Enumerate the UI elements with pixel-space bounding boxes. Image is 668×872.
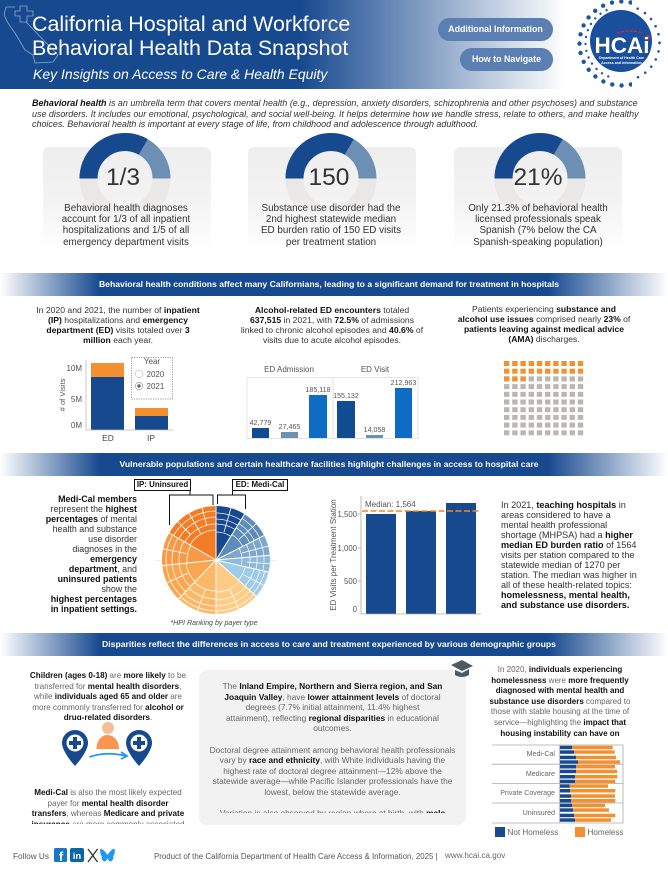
bar chart: alcohol-related ED encounters: ED Visit bbox=[361, 365, 390, 374]
bar chart: alcohol-related ED encounters bbox=[246, 365, 418, 439]
text: teaching hospitals: shortage (MHPSA) had a higher bbox=[501, 530, 633, 540]
stat text 2: per treatment station bbox=[286, 237, 376, 248]
bar chart: homelessness by payer: Medicare bbox=[526, 770, 555, 778]
legend: year selector: 2020 bbox=[146, 370, 165, 379]
stat number 1/3: 1/3 bbox=[106, 164, 140, 191]
gauge 2 bbox=[294, 142, 368, 215]
bar chart: ED visits per treatment station: Median: 1,564 bbox=[365, 500, 416, 509]
header banner bbox=[0, 0, 668, 89]
text: regional and racial disparities: lowest, below the statewide average. bbox=[264, 787, 401, 797]
donut gauges bbox=[80, 133, 586, 208]
logo: HCAI bbox=[577, 0, 661, 88]
text: IP and ED visits bbox=[36, 305, 200, 345]
legend: year selector: 2021 bbox=[146, 382, 165, 391]
section heading: demand bbox=[0, 273, 668, 296]
logo: HCAI: Access and Information bbox=[601, 61, 642, 65]
chart note: *HPI Ranking by payer type bbox=[170, 619, 258, 627]
fade over gauge 1 bottom bbox=[75, 198, 175, 226]
text: regional and racial disparities: Joaquin Valley, have lower attainment levels of doctoral bbox=[224, 692, 441, 702]
text: children and older adults bbox=[30, 671, 186, 720]
text: regional and racial disparities: degrees (7.7% initial attainment, 11.4% highest bbox=[246, 702, 419, 712]
text: AMA discharges: alcohol use issues comprised nearly 23% of bbox=[458, 314, 630, 324]
button: how to navigate bbox=[460, 48, 553, 71]
subtitle: Key Insights on Access to Care & Health Equity bbox=[33, 66, 327, 82]
text: Medi-Cal members: show the bbox=[101, 584, 137, 594]
section heading: disparities: Disparities reflect the differences in access to care and treatment experienced by various demographic groups bbox=[102, 639, 556, 649]
bar chart: ED visits per treatment station: 0 bbox=[353, 605, 358, 614]
bar chart: ED visits per treatment station bbox=[329, 496, 481, 614]
bar chart: alcohol-related ED encounters: 155,132 bbox=[333, 392, 359, 400]
text: Medi-Cal members: diagnoses in the bbox=[72, 544, 137, 554]
text: IP and ED visits: million each year. bbox=[83, 335, 153, 345]
section heading: disparities bbox=[0, 633, 668, 656]
text: regional and racial disparities: outcomes. bbox=[313, 723, 352, 733]
stat text 2 bbox=[261, 202, 401, 248]
text: Medi-Cal transfers: payer for mental health disorder bbox=[47, 799, 168, 808]
logo: HCAI: Department of Health Care bbox=[599, 56, 644, 60]
text: Medi-Cal members: health and substance bbox=[53, 524, 137, 534]
text: teaching hospitals: station. The median was higher in bbox=[501, 570, 637, 580]
stat text 1: hospitalizations and 1/5 of all bbox=[63, 225, 189, 236]
text: homelessness: housing instability can have on bbox=[500, 729, 620, 738]
text: homelessness: In 2020, individuals experiencing bbox=[498, 665, 622, 674]
text: homelessness bbox=[490, 665, 630, 738]
button: additional information: Additional Information bbox=[448, 24, 543, 34]
button: how to navigate: How to Navigate bbox=[472, 54, 541, 64]
text: Medi-Cal members: use disorder bbox=[88, 534, 137, 544]
stat text 3: Only 21.3% of behavioral health bbox=[468, 202, 608, 214]
bar chart: visits by setting: 5M bbox=[71, 395, 82, 404]
text: alcohol-related encounters bbox=[241, 305, 424, 345]
text: regional and racial disparities: vary by race and ethnicity, with White individuals having the bbox=[220, 755, 445, 765]
text: regional and racial disparities: attainment), reflecting regional disparities in educational bbox=[226, 713, 439, 723]
text: teaching hospitals: mental health professional bbox=[501, 520, 607, 530]
bar chart: visits by setting: IP bbox=[147, 433, 155, 443]
text: teaching hospitals: areas considered to have a bbox=[501, 510, 611, 520]
bar chart: alcohol-related ED encounters: 42,779 bbox=[250, 419, 271, 427]
section heading: vulnerable populations: Vulnerable populations and certain healthcare facilities highlight challenges in access to hospital care bbox=[119, 459, 539, 469]
intro text bbox=[32, 98, 639, 129]
text: regional and racial disparities: The Inland Empire, Northern and Sierra region, and San bbox=[223, 681, 442, 691]
text: IP and ED visits: In 2020 and 2021, the number of inpatient bbox=[36, 305, 200, 315]
text: teaching hospitals bbox=[501, 500, 637, 610]
text: Medi-Cal members: emergency bbox=[90, 554, 137, 564]
stat text 3 bbox=[468, 202, 608, 248]
stat number 21%: 21% bbox=[513, 164, 563, 191]
footer: follow us: Follow Us bbox=[13, 852, 49, 861]
gauge 1 bbox=[88, 142, 162, 215]
bar chart: alcohol-related ED encounters: 27,465 bbox=[279, 423, 300, 431]
text: Medi-Cal members: department, and bbox=[69, 564, 137, 574]
bar chart: alcohol-related ED encounters: ED Admission bbox=[264, 365, 314, 374]
text: alcohol-related encounters: visits due to acute alcohol episodes. bbox=[263, 335, 401, 345]
text: homelessness: homelessness were more frequently bbox=[491, 676, 629, 685]
bar chart: ED visits per treatment station: 1,500 bbox=[337, 510, 358, 519]
bar chart: alcohol-related ED encounters: 212,963 bbox=[391, 379, 416, 387]
text: children and older adults: transferred for mental health disorders, bbox=[35, 682, 181, 691]
callout: IP uninsured bbox=[134, 479, 191, 491]
bar chart: visits by setting: 0M bbox=[71, 421, 82, 430]
text: teaching hospitals: homelessness, mental health, bbox=[501, 590, 630, 600]
bar chart: ED visits per treatment station: 1,000 bbox=[337, 544, 358, 553]
text: AMA discharges: patients leaving against medical advice bbox=[464, 324, 624, 334]
bar chart: homelessness by payer: Private Coverage bbox=[500, 789, 555, 797]
text: regional and racial disparities: statewide average—while Pacific Islander professionals have the bbox=[213, 776, 452, 786]
panel: stat card 150 bbox=[248, 147, 416, 252]
text: teaching hospitals: and substance use disorders. bbox=[501, 600, 629, 610]
text: regional and racial disparities bbox=[210, 681, 456, 813]
text: regional and racial disparities: highest rate of doctoral degree attainment—12% above the bbox=[223, 766, 442, 776]
bar chart: homelessness by payer: Medi-Cal bbox=[527, 750, 555, 758]
text: Medi-Cal members: uninsured patients bbox=[58, 574, 137, 584]
text: IP and ED visits: (IP) hospitalizations and emergency bbox=[48, 315, 188, 325]
stat text 2: Substance use disorder had the bbox=[262, 202, 400, 214]
text: Medi-Cal members: percentages of mental bbox=[46, 514, 137, 524]
intro text: Behavioral health is an umbrella term that covers mental health (e.g., depression, anxiety disorders, schizophrenia and other psychoses) and substance bbox=[32, 98, 638, 108]
footer: website: www.hcai.ca.gov bbox=[445, 851, 505, 860]
title: Behavioral Health Data Snapshot bbox=[32, 36, 348, 60]
fade over gauge 3 bottom bbox=[490, 198, 590, 226]
text: Medi-Cal transfers bbox=[32, 788, 184, 824]
text: Medi-Cal members bbox=[46, 494, 137, 614]
text: Medi-Cal members: highest percentages bbox=[51, 594, 137, 604]
text: Medi-Cal transfers: Medi-Cal is also the most likely expected bbox=[34, 788, 182, 797]
footer: product credit: Product of the California Department of Health Care Access & Information, 2025 | bbox=[154, 852, 438, 861]
callout connector lines bbox=[169, 491, 246, 525]
text: homelessness: substance use disorders compared to bbox=[490, 697, 630, 706]
icon: California outline with cross bbox=[4, 6, 58, 64]
text: homelessness: diagnosed with mental health and bbox=[496, 686, 624, 695]
text: AMA discharges: (AMA) discharges. bbox=[508, 334, 580, 344]
text: homelessness: service—highlighting the impact that bbox=[494, 718, 626, 727]
stat text 3: Spanish (7% below the CA bbox=[479, 225, 597, 236]
text: alcohol-related encounters: linked to chronic alcohol episodes and 40.6% of bbox=[241, 325, 423, 335]
text: homelessness: those with stable housing at the time of bbox=[491, 707, 629, 716]
fade over gauge 2 bottom bbox=[281, 198, 381, 226]
text: teaching hospitals: statewide median of 1270 per bbox=[501, 560, 620, 570]
stat text 2: 2nd highest statewide median bbox=[266, 214, 396, 225]
callout: IP uninsured: IP: Uninsured bbox=[137, 480, 188, 489]
text: AMA discharges bbox=[458, 304, 630, 344]
text: Medi-Cal members: represent the highest bbox=[51, 504, 137, 514]
radial chart: HPI ranking by payer type bbox=[155, 506, 277, 614]
panel: stat card 1/3 bbox=[43, 147, 211, 252]
text: Medi-Cal members: Medi-Cal members bbox=[58, 494, 137, 504]
icon: graduation cap bbox=[451, 660, 473, 677]
stat text 2: ED burden ratio of 150 ED visits bbox=[261, 225, 401, 236]
stat text 1: account for 1/3 of all inpatient bbox=[62, 214, 190, 225]
stat text 3: licensed professionals speak bbox=[475, 214, 601, 225]
text: teaching hospitals: In 2021, teaching hospitals in bbox=[501, 500, 626, 510]
section heading: vulnerable populations bbox=[0, 453, 668, 476]
bar chart: visits by setting: ED bbox=[102, 433, 114, 443]
text: Medi-Cal transfers: transfers, whereas Medicare and private bbox=[32, 809, 184, 818]
panel: stat card 21% bbox=[454, 147, 622, 252]
legend: homeless status: Not Homeless bbox=[508, 828, 558, 837]
text: alcohol-related encounters: Alcohol-related ED encounters totaled bbox=[255, 305, 409, 315]
text: children and older adults: more commonly transferred for alcohol or bbox=[32, 703, 184, 712]
legend: year selector bbox=[131, 357, 173, 400]
stat text 3: Spanish-speaking population) bbox=[473, 237, 603, 248]
callout: ED Medi-Cal: ED: Medi-Cal bbox=[236, 480, 284, 489]
section heading: demand: Behavioral health conditions affect many Californians, leading to a significant demand for treatment in hospitals bbox=[99, 279, 559, 289]
title: California Hospital and Workforce bbox=[32, 12, 350, 36]
text: children and older adults: Children (ages 0-18) are more likely to be bbox=[30, 671, 186, 680]
legend: year selector: Year bbox=[144, 357, 160, 366]
text: teaching hospitals: all of these health-related topics: bbox=[501, 580, 632, 590]
logo: HCAI: HCAi bbox=[594, 33, 650, 58]
gauge 3 bbox=[504, 142, 576, 215]
stat number 150: 150 bbox=[309, 164, 349, 191]
text: IP and ED visits: department (ED) visits totaled over 3 bbox=[46, 325, 190, 335]
callout: ED Medi-Cal bbox=[232, 479, 288, 491]
stat text 1: Behavioral health diagnoses bbox=[64, 202, 188, 214]
bar chart: ED visits per treatment station: ED Visits per Treatment Station bbox=[329, 499, 338, 611]
bar chart: visits by setting: 10M bbox=[66, 364, 82, 373]
bar chart: alcohol-related ED encounters: 14,058 bbox=[364, 426, 385, 434]
legend: homeless status: Homeless bbox=[588, 828, 623, 837]
stat text 1 bbox=[62, 202, 190, 248]
bar chart: visits by setting: # of Visits bbox=[58, 378, 67, 411]
text: children and older adults: while individuals aged 65 and older are bbox=[34, 692, 182, 701]
text: alcohol-related encounters: 637,515 in 2021, with 72.5% of admissions bbox=[250, 315, 414, 325]
text: teaching hospitals: visits per station compared to the bbox=[501, 550, 634, 560]
icons: social media: f bbox=[59, 849, 64, 864]
text: Medi-Cal members: in inpatient settings. bbox=[51, 604, 137, 614]
stat text 1: emergency department visits bbox=[63, 237, 189, 248]
text: regional and racial disparities: Doctoral degree attainment among behavioral health professionals bbox=[210, 745, 455, 755]
panel: doctoral attainment bbox=[199, 670, 466, 825]
intro text: choices. Behavioral health is important at every stage of life, from childhood and adolescence through adulthood. bbox=[32, 119, 478, 129]
icons: social media: in bbox=[73, 851, 81, 862]
button: additional information bbox=[438, 18, 553, 41]
bar chart: alcohol-related ED encounters: 185,118 bbox=[305, 386, 331, 394]
intro text: use disorders. It includes our emotional, psychological, and social well-being. It helps determine how we handle stress, relate to others, and make healthy bbox=[32, 109, 639, 119]
text: teaching hospitals: median ED burden ratio of 1564 bbox=[501, 540, 636, 550]
waffle chart: 23 percent AMA discharges bbox=[504, 361, 584, 436]
text: AMA discharges: Patients experiencing substance and bbox=[472, 304, 616, 314]
bar chart: ED visits per treatment station: 500 bbox=[344, 577, 358, 586]
bar chart: homelessness by payer: Uninsured bbox=[523, 809, 555, 817]
title bbox=[32, 12, 350, 60]
